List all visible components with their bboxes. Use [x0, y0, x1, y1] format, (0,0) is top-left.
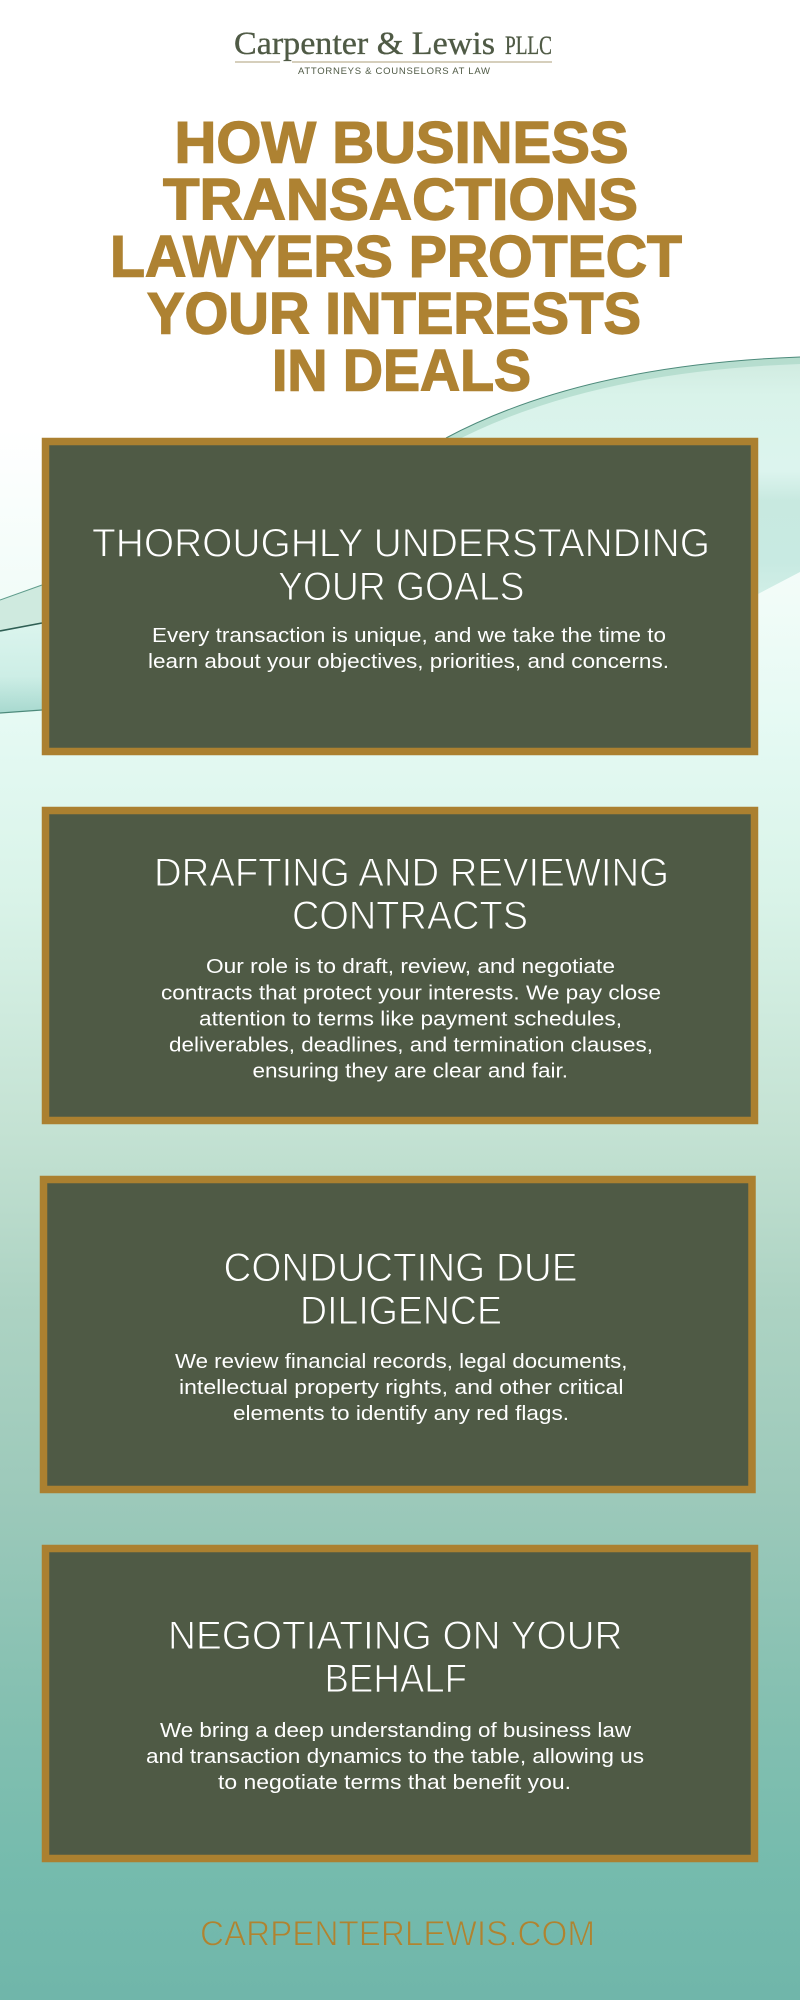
panel body text: intellectual property rights, and other critical — [179, 1376, 624, 1399]
title: HOW BUSINESS — [174, 110, 628, 176]
panel heading — [224, 1246, 578, 1333]
panel body text: deliverables, deadlines, and termination clauses, — [169, 1034, 653, 1056]
title — [110, 110, 682, 404]
panel: conducting due diligence — [44, 1180, 752, 1490]
panel frame — [46, 1548, 754, 1858]
panel body text — [146, 1719, 644, 1794]
logo tagline: ATTORNEYS & COUNSELORS AT LAW — [298, 66, 490, 77]
panel heading: THOROUGHLY UNDERSTANDING — [92, 522, 710, 566]
logo wordmark: Carpenter & Lewis — [234, 26, 495, 62]
panel body text: contracts that protect your interests. We pay close — [161, 982, 661, 1004]
panel body text: attention to terms like payment schedules, — [199, 1008, 622, 1030]
panel heading: DRAFTING AND REVIEWING — [154, 851, 669, 895]
panel body text: We review financial records, legal documents, — [175, 1350, 628, 1373]
panel body text — [148, 624, 669, 673]
panel heading — [168, 1614, 622, 1701]
panel heading — [92, 522, 710, 609]
panel heading: BEHALF — [324, 1657, 467, 1701]
panel body text: to negotiate terms that benefit you. — [218, 1771, 571, 1794]
panel heading: CONDUCTING DUE — [224, 1246, 578, 1290]
panel frame — [46, 442, 754, 752]
panel body text: and transaction dynamics to the table, allowing us — [146, 1745, 644, 1768]
panel body text — [161, 955, 661, 1082]
panel heading: YOUR GOALS — [278, 565, 524, 609]
title: LAWYERS PROTECT — [110, 224, 682, 290]
logo — [234, 26, 552, 77]
logo rule — [235, 61, 552, 63]
panel heading — [154, 851, 669, 938]
footer website: CARPENTERLEWIS.COM — [200, 1915, 595, 1954]
title: TRANSACTIONS — [163, 168, 638, 232]
panel body text — [175, 1350, 628, 1425]
decorative wave: left — [0, 585, 60, 713]
title: YOUR INTERESTS — [147, 282, 641, 346]
panel body text: Every transaction is unique, and we take the time to — [152, 624, 666, 647]
panel: thoroughly understanding your goals — [46, 442, 754, 752]
panel heading: DILIGENCE — [300, 1289, 502, 1333]
panel frame — [46, 810, 754, 1120]
panel body text: learn about your objectives, priorities, and concerns. — [148, 650, 669, 673]
panel heading: CONTRACTS — [292, 894, 528, 938]
panel body text: elements to identify any red flags. — [233, 1402, 569, 1425]
panel body text: ensuring they are clear and fair. — [252, 1059, 568, 1082]
panel frame — [44, 1180, 752, 1490]
logo suffix: PLLC — [505, 31, 552, 60]
decorative wave: right — [446, 356, 800, 594]
panel heading: NEGOTIATING ON YOUR — [168, 1614, 622, 1658]
title: IN DEALS — [272, 338, 531, 404]
panel body text: We bring a deep understanding of business law — [160, 1719, 631, 1742]
panel: negotiating on your behalf — [46, 1548, 754, 1858]
panel: drafting and reviewing contracts — [46, 810, 754, 1120]
panel body text: Our role is to draft, review, and negotiate — [206, 955, 615, 978]
